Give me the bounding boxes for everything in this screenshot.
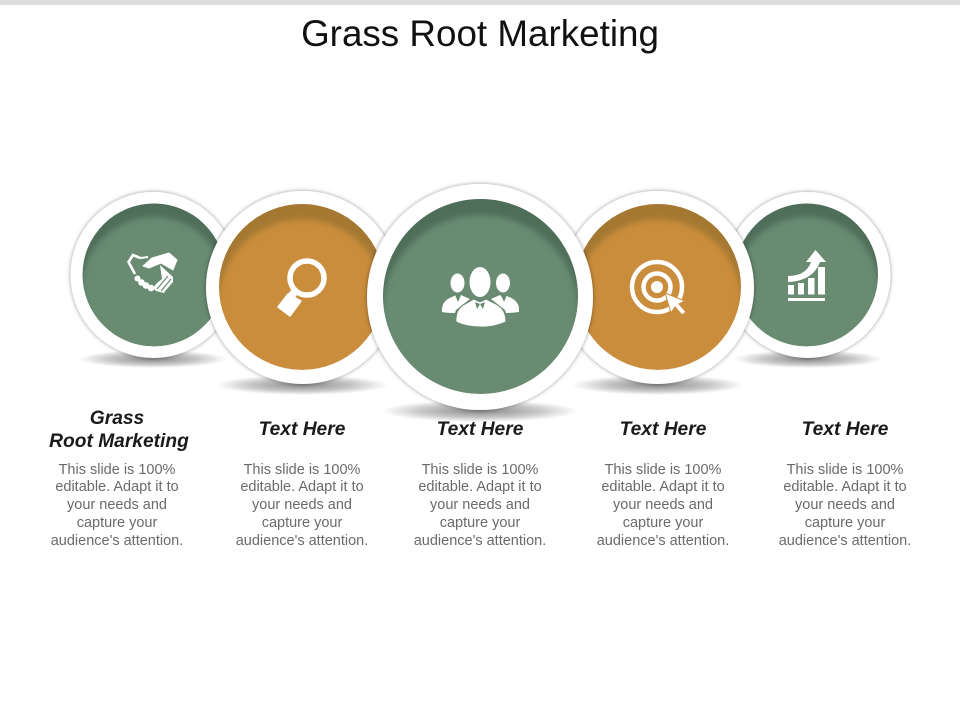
column 4 text — [597, 419, 729, 549]
body 5 — [779, 462, 911, 549]
body 3 — [414, 462, 546, 549]
icon: target with cursor — [632, 262, 686, 315]
body 2: editable. Adapt it to — [240, 479, 364, 495]
body 2 — [236, 462, 368, 549]
body 5: capture your — [805, 515, 885, 531]
body 4 — [597, 462, 729, 549]
body 5: your needs and — [795, 497, 895, 513]
column 1 text — [49, 408, 189, 549]
title: Grass Root Marketing — [301, 13, 659, 54]
body 5: audience's attention. — [779, 533, 911, 549]
heading 3: Text Here — [437, 419, 523, 440]
body 2: This slide is 100% — [244, 462, 360, 478]
body 4: your needs and — [613, 497, 713, 513]
body 3: your needs and — [430, 497, 530, 513]
body 2: capture your — [262, 515, 342, 531]
body 5: This slide is 100% — [787, 462, 903, 478]
icon: handshake — [128, 253, 177, 293]
body 4: audience's attention. — [597, 533, 729, 549]
body 1: editable. Adapt it to — [55, 479, 179, 495]
body 5: editable. Adapt it to — [783, 479, 907, 495]
body 3: editable. Adapt it to — [418, 479, 542, 495]
body 4: editable. Adapt it to — [601, 479, 725, 495]
column 2 text — [236, 419, 368, 549]
heading 5: Text Here — [802, 419, 888, 440]
circle chain graphic — [68, 181, 894, 422]
heading 2: Text Here — [259, 419, 345, 440]
body 3: capture your — [440, 515, 520, 531]
icon: magnifier — [278, 261, 324, 316]
body 3: This slide is 100% — [422, 462, 538, 478]
body 1: your needs and — [67, 497, 167, 513]
heading 1: Grass — [90, 408, 144, 429]
body 4: capture your — [623, 515, 703, 531]
icon: team of three people — [442, 267, 519, 327]
circle 5: green growth chart — [735, 189, 894, 368]
heading 4: Text Here — [620, 419, 706, 440]
column 3 text — [414, 419, 546, 549]
circle 3: central green team — [362, 184, 598, 431]
icon: growth chart — [788, 250, 826, 301]
column 5 text — [779, 419, 911, 549]
circle 4: orange target — [574, 188, 756, 394]
top bar — [0, 0, 960, 5]
body 1: capture your — [77, 515, 157, 531]
heading 1 — [49, 408, 189, 452]
circle 2: orange magnifier — [204, 188, 386, 394]
body 4: This slide is 100% — [605, 462, 721, 478]
body 3: audience's attention. — [414, 533, 546, 549]
heading 1: Root Marketing — [49, 431, 189, 452]
body 2: audience's attention. — [236, 533, 368, 549]
body 1 — [51, 462, 183, 549]
body 2: your needs and — [252, 497, 352, 513]
body 1: audience's attention. — [51, 533, 183, 549]
circle 1: green handshake — [68, 189, 226, 368]
body 1: This slide is 100% — [59, 462, 175, 478]
